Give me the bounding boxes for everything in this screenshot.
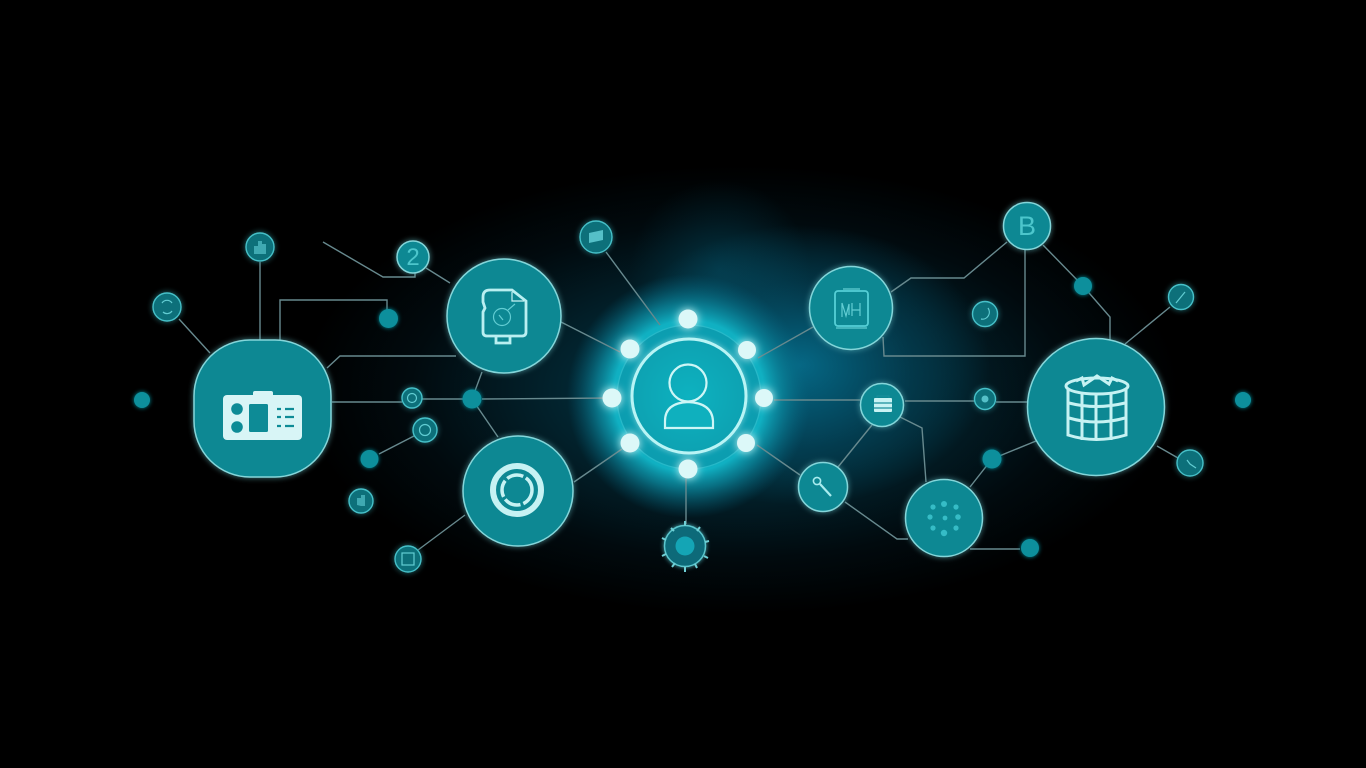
letter B: B [1018, 211, 1036, 241]
plain dots [134, 277, 1251, 557]
background glow [300, 165, 1180, 615]
icon: wrench [813, 477, 831, 496]
small node: tag [349, 489, 373, 513]
node: number 2 [397, 241, 429, 273]
small node: clock [1177, 450, 1203, 476]
number 2: 2 [406, 244, 420, 271]
small node: window [395, 546, 421, 572]
icon: calendar basket [1066, 376, 1128, 441]
node: calendar basket hub [1028, 338, 1164, 476]
small node: left cycle [153, 293, 181, 321]
small node: top building [246, 233, 274, 261]
node: briefcase [860, 384, 904, 426]
node: document [447, 259, 561, 373]
node: tablet [810, 266, 892, 350]
small node: refresh [402, 388, 422, 408]
node: dot cluster [906, 480, 982, 556]
node: ID card hub [194, 340, 331, 477]
icon: briefcase [874, 396, 892, 412]
icon: user [665, 364, 713, 428]
icon: dot cluster [927, 501, 961, 536]
icon: document [483, 290, 526, 343]
node: letter B [1004, 202, 1050, 250]
icon: tablet [835, 289, 868, 328]
small node: phone [972, 302, 998, 326]
small node: chat [974, 388, 996, 410]
node: central user hub [602, 310, 773, 478]
node: gear [662, 521, 709, 572]
node: ring [463, 436, 573, 546]
inner circle [632, 339, 746, 453]
connector lines [179, 242, 1178, 550]
gear centre [676, 536, 694, 556]
satellite nodes [602, 310, 773, 478]
small node: folder [580, 221, 612, 253]
small icon nodes [153, 221, 1203, 572]
icon: ring [493, 466, 541, 514]
small node: ring [413, 418, 437, 442]
icon: ID card [223, 391, 302, 440]
node: wrench [798, 462, 848, 512]
small node: paperclip [1168, 284, 1194, 310]
